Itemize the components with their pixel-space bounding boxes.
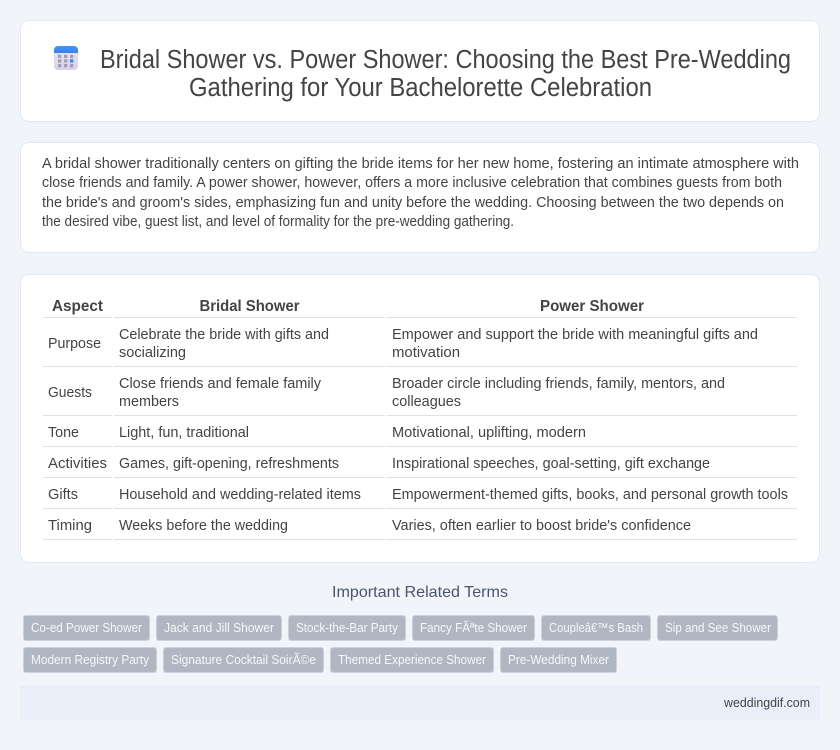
row: timing: Weeks before the wedding (119, 518, 288, 534)
table header: Aspect (52, 298, 103, 315)
row: tone: Light, fun, traditional (119, 425, 249, 441)
row: purpose: Empower and support the bride with meaningful gifts and (392, 327, 758, 343)
row: gifts: Empowerment-themed gifts, books, and personal growth tools (392, 487, 788, 503)
row: guests (43, 376, 797, 416)
row: gifts: Gifts (48, 487, 78, 503)
row: purpose (43, 327, 797, 367)
table header: Bridal Shower (200, 298, 300, 315)
row: tone (43, 425, 797, 447)
title: Gathering for Your Bachelorette Celebration (189, 74, 652, 102)
tag: Coupleâ€™s Bash (549, 621, 643, 635)
tag: Fancy FÃªte Shower (420, 621, 527, 635)
row: guests: Broader circle including friends, family, mentors, and (392, 376, 725, 392)
panel: header (20, 20, 820, 122)
row: activities (43, 456, 797, 478)
row: gifts: Household and wedding-related items (119, 487, 361, 503)
tag (288, 616, 406, 640)
intro paragraph: A bridal shower traditionally centers on gifting the bride items for her new home, fostering an intimate atmosphere with (42, 156, 799, 172)
tag: Themed Experience Shower (338, 653, 486, 667)
tag (542, 616, 650, 640)
tag (500, 648, 616, 672)
row: purpose: Purpose (48, 336, 101, 352)
row: guests: members (119, 394, 179, 410)
tag (24, 648, 156, 672)
title: Bridal Shower vs. Power Shower: Choosing the Best Pre-Wedding (100, 46, 791, 74)
tag: Sip and See Shower (665, 621, 771, 635)
icon: calendar (54, 46, 78, 70)
row: purpose: Celebrate the bride with gifts and (119, 327, 329, 343)
intro paragraph: the bride's and groom's sides, emphasizing fun and unity before the wedding. Choosing between the two depends on (42, 195, 784, 211)
tag: Pre-Wedding Mixer (508, 653, 609, 667)
tags: related terms (24, 616, 778, 672)
tag: Co-ed Power Shower (31, 621, 142, 635)
row: guests: Guests (48, 385, 92, 401)
row: timing: Timing (48, 518, 92, 534)
panel: intro text (20, 142, 820, 252)
footer bar (20, 686, 820, 720)
tag (156, 616, 282, 640)
tag (658, 616, 778, 640)
tag: Stock-the-Bar Party (296, 621, 399, 635)
tag: Jack and Jill Shower (164, 621, 274, 635)
row: purpose: socializing (119, 345, 186, 361)
tag: Modern Registry Party (31, 653, 150, 667)
panel: comparison table (20, 274, 820, 562)
heading: related terms: Important Related Terms (332, 584, 508, 601)
row: guests: Close friends and female family (119, 376, 322, 392)
row: tone: Tone (48, 425, 79, 441)
tag (412, 616, 534, 640)
table header: Power Shower (540, 298, 644, 315)
intro paragraph: the desired vibe, guest list, and level of formality for the pre-wedding gathering. (42, 214, 514, 230)
intro paragraph (42, 156, 799, 230)
row: gifts (43, 487, 797, 509)
tag (164, 648, 324, 672)
tag: Signature Cocktail SoirÃ©e (171, 653, 316, 667)
row: timing: Varies, often earlier to boost bride's confidence (392, 518, 691, 534)
row: timing (43, 518, 797, 540)
row: purpose: motivation (392, 345, 460, 361)
tag (24, 616, 150, 640)
intro paragraph: close friends and family. A power shower, however, offers a more inclusive celebration that combines guests from both (42, 175, 782, 191)
tag (330, 648, 494, 672)
row: activities: Games, gift-opening, refreshments (119, 456, 339, 472)
row: activities: Inspirational speeches, goal-setting, gift exchange (392, 456, 710, 472)
table header (43, 298, 797, 318)
row: tone: Motivational, uplifting, modern (392, 425, 586, 441)
footer source: weddingdif.com (723, 695, 810, 710)
row: activities: Activities (48, 456, 107, 472)
row: guests: colleagues (392, 394, 461, 410)
title (100, 46, 791, 102)
